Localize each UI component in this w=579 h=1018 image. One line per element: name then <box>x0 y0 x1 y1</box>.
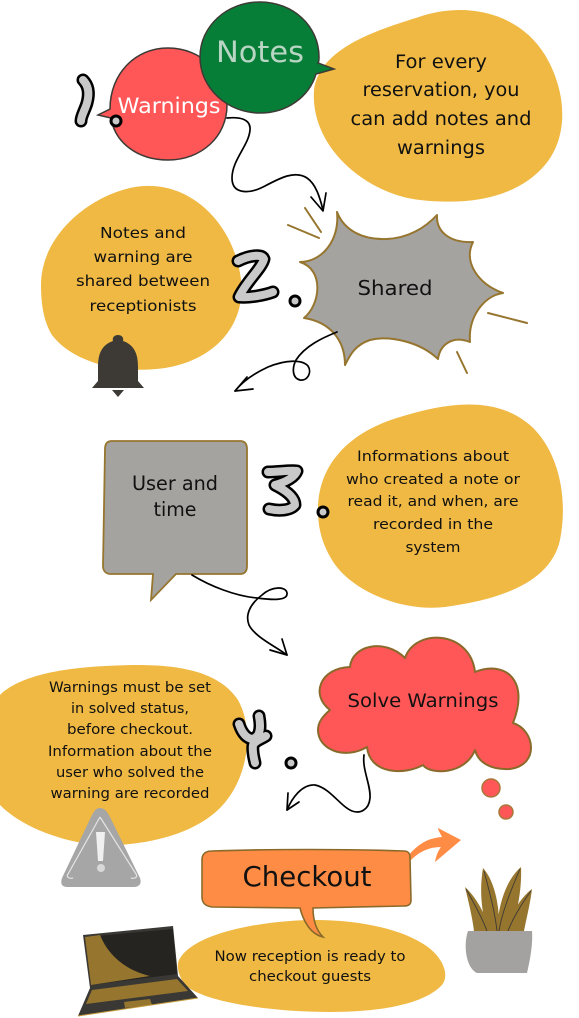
icon: laptop <box>78 926 198 1016</box>
text block: step 5 description: checkout guests <box>249 969 371 985</box>
bubble: notes <box>200 2 334 113</box>
arrow: step 3 to 4 <box>192 575 287 655</box>
text block: step 2 description: warning are <box>94 248 192 266</box>
bubble: warnings: Warnings <box>118 94 220 118</box>
thought bubbles <box>482 779 513 819</box>
text block: step 3 description: recorded in the <box>373 517 493 533</box>
text block: step 1 description: can add notes and <box>350 109 532 130</box>
plant pot <box>466 931 532 973</box>
burst: shared: Shared <box>358 276 432 300</box>
text block: step 2 description <box>41 186 242 370</box>
burst: shared <box>300 212 503 365</box>
arrow: step 4 to 5 <box>287 755 370 812</box>
speech box: user and time <box>103 441 247 600</box>
plant leaves <box>465 867 532 931</box>
speech box: user and time: User and <box>132 472 218 495</box>
blob: step 1 <box>314 10 562 202</box>
text block: step 1 description <box>314 10 562 202</box>
arrow: step 1 to 2 <box>227 118 326 211</box>
text block: step 4 description: Warnings must be set <box>49 680 211 696</box>
text block: step 5 description <box>178 920 445 1012</box>
blob: step 3 <box>318 404 563 608</box>
burst rays <box>288 208 527 373</box>
text block: step 2 description: Notes and <box>100 224 186 242</box>
text block: step 2 description: shared between <box>76 272 210 290</box>
speech box: user and time: time <box>154 498 196 521</box>
text block: step 3 description: system <box>406 540 460 556</box>
cloud: solve warnings <box>318 638 531 771</box>
text block: step 3 description <box>318 404 563 608</box>
blob: step 5 <box>178 920 445 1012</box>
text block: step 1 description: reservation, you <box>362 80 520 101</box>
blob: step 4 <box>0 665 247 845</box>
text block: step 1 description: warnings <box>397 138 485 159</box>
orange arrow <box>408 828 461 862</box>
text block: step 1 description: For every <box>395 52 487 73</box>
text block: step 4 description: before checkout. <box>67 722 193 738</box>
bubble: warnings <box>98 48 227 160</box>
text block: step 4 description: user who solved the <box>56 765 204 781</box>
step 1: bubbles <box>98 2 334 160</box>
text block: step 4 description <box>0 665 247 845</box>
icon: warning triangle <box>61 808 141 887</box>
text block: step 4 description: warning are recorded <box>50 786 210 802</box>
numeral 3 <box>268 471 328 517</box>
speech box: checkout <box>202 850 411 937</box>
numeral 4 <box>239 716 296 768</box>
speech box: checkout: Checkout <box>242 860 372 893</box>
numeral 2 <box>238 256 300 306</box>
leaf veins <box>466 869 531 931</box>
text block: step 3 description: who created a note or <box>346 472 520 488</box>
text block: step 4 description: in solved status, <box>71 701 189 717</box>
text block: step 2 description: receptionists <box>90 297 196 315</box>
text block: step 3 description: Informations about <box>357 449 509 465</box>
arrow: step 2 to 3 <box>235 332 337 391</box>
blob: step 2 <box>41 186 242 370</box>
text block: step 4 description: Information about the <box>48 744 212 760</box>
icon: bell <box>92 335 144 397</box>
numeral 1 <box>81 80 121 126</box>
bubble: notes: Notes <box>216 35 304 69</box>
cloud: solve warnings: Solve Warnings <box>348 691 498 712</box>
icon: potted plant <box>465 867 532 973</box>
text block: step 3 description: read it, and when, are <box>348 494 519 510</box>
text block: step 5 description: Now reception is ready to <box>214 949 406 965</box>
